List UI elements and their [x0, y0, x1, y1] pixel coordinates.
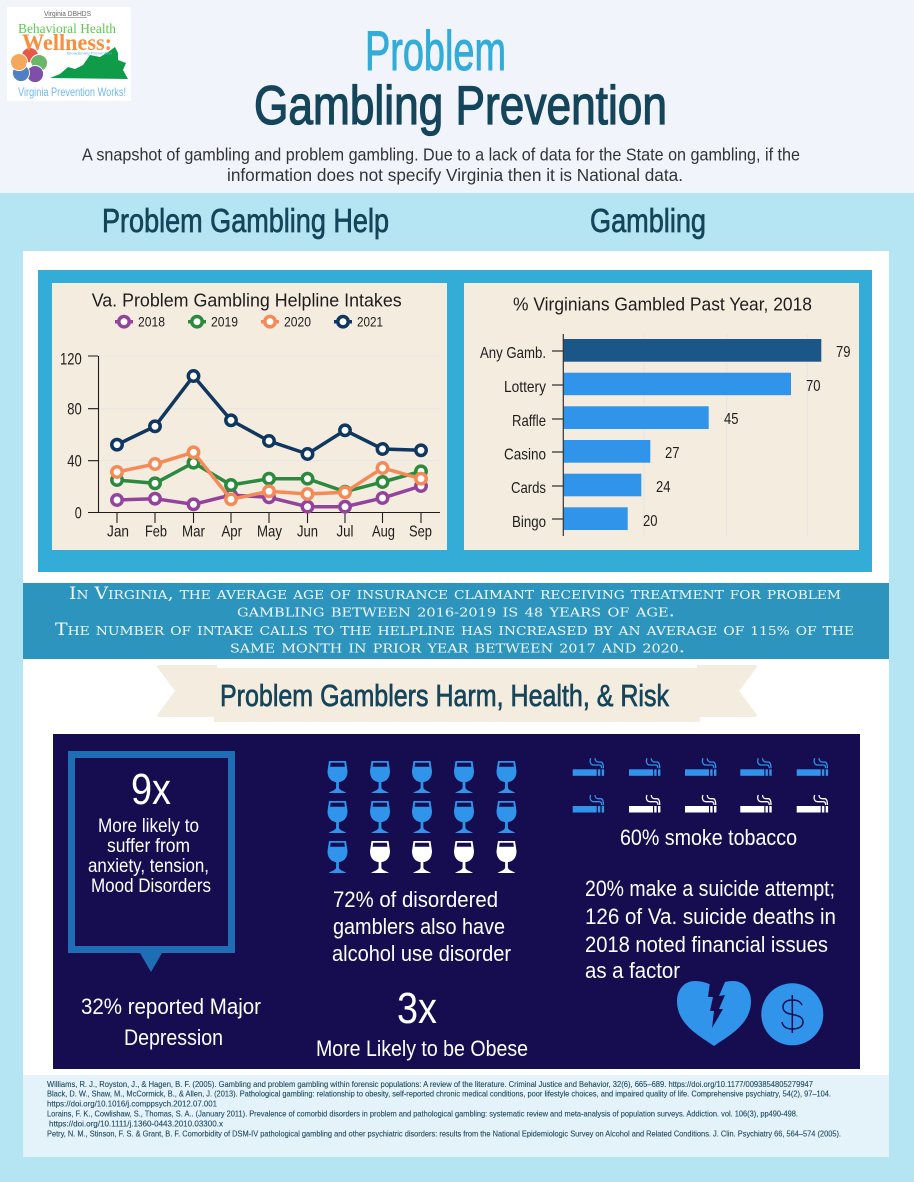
bars [563, 339, 821, 530]
category labels: Raffle [512, 413, 546, 430]
category labels [480, 345, 546, 531]
bar chart: % Virginians gambled [464, 283, 859, 550]
text: suicide: 20% make a suicide attempt; [585, 876, 835, 901]
text: suicide: as a factor [585, 958, 680, 983]
axes: 80 [67, 400, 82, 418]
series 2021 [112, 371, 426, 459]
legend: 2019 [211, 314, 238, 330]
references panel: https://doi.org/10.1111/j.1360-0443.2010.03300.x [49, 1118, 224, 1128]
subtitle text [82, 144, 800, 185]
legend [115, 314, 383, 330]
logo: Virginia Behavioral Health Wellness: Virginia DBHDS [44, 9, 91, 18]
ribbon heading: Problem Gamblers Harm, Health, & Risk [220, 678, 669, 713]
axes [60, 350, 440, 541]
chart container panel [38, 270, 872, 572]
legend: 2021 [357, 314, 383, 330]
logo: Virginia Behavioral Health Wellness: Behavioral Health [18, 21, 116, 36]
text: suicide: 126 of Va. suicide deaths in [585, 904, 836, 929]
references panel: Black, D. W., Shaw, M., McCormick, B., & Allen, J. (2013). Pathological gambling: relationship to obesity, self-reported chronic medical conditions, poor lifestyle choices, and impaired quality of life. Comprehensive psychiatry, 54(2), 97–104. [47, 1089, 831, 1099]
text: major depression: 32% reported Major [81, 994, 261, 1019]
banner: Virginia statistics: same month in prior year between 2017 and 2020 . [230, 638, 685, 657]
callout: 9x anxiety: suffer from [107, 836, 190, 857]
axes: Mar [182, 524, 206, 541]
subtitle text: A snapshot of gambling and problem gambling. Due to a lack of data for the State on gambling, if the [82, 144, 800, 164]
legend: 2018 [138, 314, 165, 330]
axes: 40 [67, 453, 82, 471]
axes: Jun [297, 524, 318, 541]
stat: 3x obese [316, 984, 528, 1061]
logo: Virginia Behavioral Health Wellness [7, 7, 131, 101]
banner: Virginia statistics: gambling between 2016-2019 is 48 years of age. [237, 602, 675, 621]
title: Problem [365, 19, 506, 82]
value labels: 79 [836, 344, 851, 361]
callout: 9x anxiety: 9x [131, 765, 171, 814]
line chart: helpline intakes [52, 283, 447, 550]
references panel [23, 1075, 889, 1157]
text: alcohol use disorder [332, 887, 511, 966]
heading: Gambling: Gambling [590, 202, 706, 239]
category labels: Casino [504, 446, 546, 464]
text: alcohol use disorder: alcohol use disorder [332, 941, 511, 966]
icon: broken heart [677, 981, 751, 1046]
title [254, 19, 667, 136]
logo: Virginia Behavioral Health Wellness: Wellness: [22, 30, 112, 55]
axes: Jul [336, 524, 354, 541]
logo: Virginia Behavioral Health Wellness: Virginia Prevention Works! [18, 85, 126, 99]
text: suicide: 2018 noted financial issues [585, 932, 828, 957]
axes: Feb [145, 524, 167, 541]
axes: May [257, 524, 282, 541]
category labels: Lottery [504, 379, 546, 396]
series 2020 [112, 447, 426, 504]
chart title: Va. Problem Gambling Helpline Intakes [92, 290, 402, 311]
axes: Jan [107, 524, 129, 541]
text: alcohol use disorder: gamblers also have [333, 914, 505, 939]
banner: Virginia statistics: In Virginia, the average age of insurance claimant receiving treatment for problem [69, 584, 841, 603]
panel: harm, health and risk [53, 734, 860, 1069]
text: major depression: Depression [124, 1025, 223, 1050]
references panel: Lorains, F. K., Cowlishaw, S., Thomas, S. A.. (January 2011). Prevalence of comorbid disorders in problem and pathological gambling: systematic review and meta-analysis of population surveys. Addiction. vol. 106(3), pp490-498. [47, 1108, 798, 1118]
category labels: Cards [511, 480, 546, 497]
stat: 3x obese: 3x [397, 984, 437, 1033]
callout: 9x anxiety: Mood Disorders [91, 876, 211, 897]
banner: Virginia statistics: The number of intake calls to the helpline has increased by an average of 115% of the [55, 620, 854, 639]
value labels: 27 [665, 445, 680, 462]
value labels: 24 [656, 479, 671, 496]
callout: 9x anxiety [72, 754, 232, 972]
title: Gambling Prevention [254, 74, 667, 136]
subtitle text: information does not specify Virginia then it is National data. [227, 165, 683, 185]
value labels: 45 [724, 411, 739, 428]
axes: 0 [75, 504, 82, 522]
category labels: Any Gamb. [480, 345, 546, 362]
text: smoke tobacco: 60% smoke tobacco [620, 825, 797, 850]
axes: 120 [60, 350, 82, 368]
icon array: wine glasses [328, 761, 516, 873]
series 2019 [112, 458, 426, 497]
ribbon heading [157, 665, 757, 722]
heading: Problem Gambling Help: Problem Gambling Help [102, 202, 389, 239]
series 2018 [112, 481, 426, 512]
text: major depression [81, 994, 261, 1050]
legend: 2020 [284, 314, 311, 330]
category labels: Bingo [512, 514, 546, 531]
references panel: https://doi.org/10.1016/j.comppsych.2012.07.001 [47, 1098, 217, 1108]
banner: Virginia statistics [23, 583, 889, 659]
references panel: Williams, R. J., Royston, J., & Hagen, B. F. (2005). Gambling and problem gambling within forensic populations: A review of the literature. Criminal Justice and Behavior, 32(6), 665–689. https://doi.org/10.1177/0093854805279947 [47, 1079, 813, 1089]
axes: Aug [372, 524, 395, 541]
callout: 9x anxiety: More likely to [98, 816, 199, 837]
axes: Apr [222, 524, 243, 541]
callout: 9x anxiety: anxiety, tension, [88, 856, 209, 877]
axes: Sep [409, 524, 432, 541]
value labels: 70 [806, 378, 821, 395]
value labels: 20 [643, 513, 658, 530]
value labels [643, 344, 851, 530]
icon: dollar coin [761, 983, 823, 1045]
icon array: cigarettes [573, 758, 828, 812]
text: alcohol use disorder: 72% of disordered [333, 887, 498, 912]
stat: 3x obese: More Likely to be Obese [316, 1036, 528, 1061]
logo: Virginia Behavioral Health Wellness: Broadening Prevention [67, 50, 112, 56]
chart title: % Virginians Gambled Past Year, 2018 [513, 294, 812, 315]
text: suicide [585, 876, 836, 983]
